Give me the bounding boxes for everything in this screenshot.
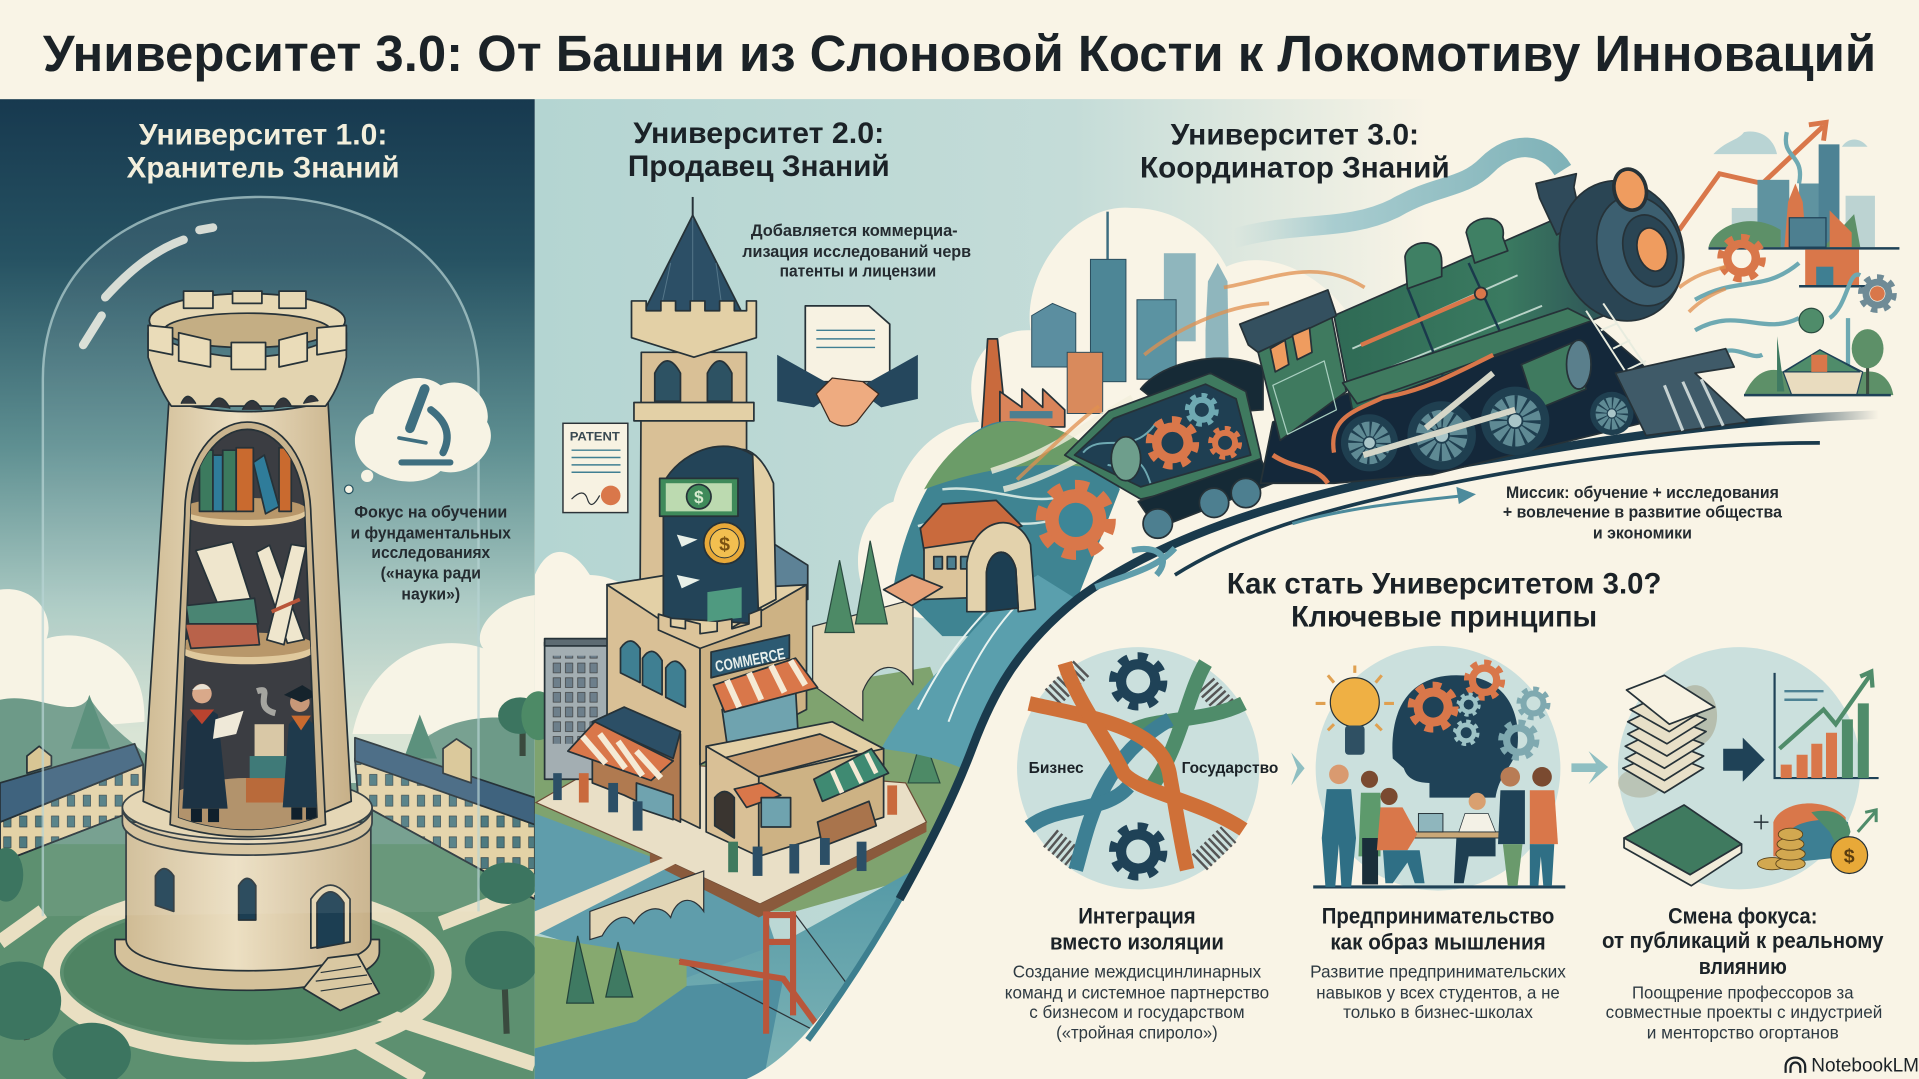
cowcatcher — [1615, 349, 1748, 436]
title: Университет 3.0: От Башни из Слоновой Кости к Локомотиву Инноваций — [43, 24, 1876, 82]
lawn — [0, 844, 535, 1079]
heading: university 1.0: Университет 1.0: — [139, 118, 387, 151]
bar chart — [1775, 672, 1879, 778]
smokestack — [1536, 174, 1581, 235]
awning: green — [814, 749, 889, 801]
gears in head — [1411, 685, 1455, 729]
student figure — [283, 685, 321, 820]
heading: university 3.0 — [1140, 118, 1450, 184]
clouds — [1713, 131, 1868, 154]
trees — [825, 541, 887, 632]
heading: university 1.0: Хранитель Знаний — [127, 151, 400, 184]
lower bridges — [535, 856, 857, 1046]
spire — [644, 197, 742, 312]
green book — [1624, 805, 1742, 886]
direction arrow — [1292, 487, 1476, 524]
campus paths — [0, 887, 535, 1079]
caption: university 1.0: Фокус на обучении — [354, 503, 507, 521]
tower battlements — [148, 291, 346, 410]
professor figure — [182, 684, 244, 822]
money arch — [660, 446, 776, 624]
labels: Бизнес — [1029, 760, 1084, 777]
person 2 — [1358, 771, 1381, 884]
navy arrow — [1723, 738, 1765, 782]
NotebookLM badge: NotebookLM — [1811, 1055, 1919, 1077]
node — [1799, 308, 1824, 333]
tower shaft — [143, 401, 351, 826]
chevron — [1291, 752, 1305, 785]
person 1 — [1322, 765, 1356, 887]
stone viaduct — [813, 599, 913, 721]
caption: university 1.0: исследованиях — [371, 544, 491, 562]
left tree — [521, 691, 556, 740]
plaza — [536, 758, 926, 904]
principle 2 text: Развитие предпринимательских — [1310, 961, 1566, 981]
shelf: middle — [181, 632, 313, 664]
caption: university 1.0: науки») — [401, 585, 460, 603]
person 5 — [1498, 767, 1525, 886]
caption: mission: Миссик: обучение + исследования — [1506, 484, 1779, 502]
right side: city and growth — [1679, 122, 1899, 395]
orange pipes — [1333, 355, 1493, 453]
growth arrow — [1679, 122, 1826, 230]
principle 3 text: и менторство огортанов — [1647, 1023, 1839, 1043]
handshake with contract — [777, 306, 918, 426]
trees — [567, 936, 633, 1003]
big orange gear with teal ornaments — [1041, 486, 1175, 587]
principle 3: focus shift circle — [1618, 647, 1879, 889]
locomotive — [1065, 164, 1748, 538]
tower interior — [169, 421, 326, 838]
sleeves and hands — [777, 355, 838, 407]
impact blob and coins: $ — [1844, 845, 1855, 867]
panel: university 2.0 and 3.0 background — [535, 99, 1919, 1079]
microscope icon — [399, 389, 450, 462]
patent document — [563, 423, 628, 513]
belfry — [632, 301, 756, 599]
principle 2 text — [1310, 904, 1566, 1022]
awning: right — [714, 658, 818, 712]
gear: orange — [1721, 237, 1762, 279]
caption: university 2.0: лизация исследований черв — [742, 243, 971, 261]
lightbulb — [1316, 666, 1394, 755]
gears — [1113, 656, 1163, 706]
clouds — [0, 589, 538, 734]
principle 2 text: только в бизнес-школах — [1343, 1002, 1533, 1022]
stacked books and steam — [246, 690, 286, 803]
principle 1 text: Интеграция — [1078, 904, 1196, 929]
impact blob and coins — [1754, 803, 1876, 873]
gear: grey — [1861, 277, 1894, 310]
tree — [908, 734, 940, 783]
factory block — [1799, 250, 1866, 286]
back wing roof — [765, 538, 808, 599]
heading: university 1.0 — [127, 118, 400, 184]
arrow between principles — [1571, 751, 1608, 784]
strands — [1029, 663, 1243, 870]
principle 3 text: влиянию — [1699, 954, 1787, 979]
principle 2: entrepreneurship circle — [1313, 646, 1565, 891]
boiler — [1334, 206, 1646, 410]
arrows — [677, 535, 700, 588]
left factory — [982, 339, 1065, 434]
smokebox — [1541, 164, 1702, 337]
principle 3 text: от публикаций к реальному — [1602, 928, 1884, 953]
books on shelf — [199, 448, 291, 514]
caption: mission — [1503, 484, 1783, 542]
principle 3 text: Поощрение профессоров за — [1632, 982, 1854, 1002]
banknote: $ — [694, 487, 704, 507]
caption: university 2.0 — [742, 222, 971, 280]
shelf: top — [184, 498, 306, 526]
lower market block — [706, 722, 889, 856]
lower right cream area — [747, 415, 1919, 1079]
caption: university 2.0: Добавляется коммерциа- — [751, 222, 958, 240]
scrolls and books — [185, 542, 306, 648]
thought cloud with microscope — [345, 378, 491, 494]
head silhouette — [1392, 675, 1518, 798]
patent document: PATENT — [570, 430, 620, 443]
waterfall — [881, 575, 1077, 771]
principle 1 text: Создание междисцинлинарных — [1013, 961, 1261, 981]
grey side building — [545, 639, 608, 779]
ladder — [1586, 303, 1664, 404]
railway track — [808, 415, 1879, 1040]
person 3 — [1377, 788, 1425, 883]
house — [1744, 329, 1893, 395]
building: right campus wing — [355, 738, 535, 899]
panel: commerce tower — [535, 197, 926, 1046]
caption: university 1.0: («наука ради — [381, 565, 481, 583]
caption: mission: и экономики — [1593, 524, 1692, 542]
principle 1 text: вместо изоляции — [1050, 929, 1224, 954]
heading: university 2.0: Продавец Знаний — [628, 150, 890, 183]
trees — [0, 697, 542, 1079]
dust — [1673, 685, 1717, 746]
caption: university 1.0: и фундаментальных — [351, 524, 512, 542]
principle 1: integration circle: Государство — [1182, 760, 1279, 777]
skyline — [1708, 144, 1875, 247]
cylinder — [1521, 343, 1586, 410]
connecting rods — [1363, 373, 1515, 455]
main building block — [607, 575, 807, 828]
tender — [1065, 358, 1273, 538]
heading: university 2.0: Университет 2.0: — [633, 117, 884, 150]
principle 1: integration circle — [1017, 647, 1279, 889]
caption: university 2.0: патенты и лицензии — [780, 262, 936, 280]
principle 2 text: навыков у всех студентов, а не — [1316, 982, 1560, 1002]
contract — [805, 306, 890, 382]
principle 1 text: с бизнесом и государством — [1029, 1002, 1245, 1022]
paper stack — [1623, 675, 1715, 793]
connector lines — [1695, 132, 1860, 367]
heading: university 3.0: Университет 3.0: — [1171, 118, 1419, 151]
running board — [1343, 308, 1592, 404]
principle 2 text: как образ мышления — [1330, 929, 1546, 954]
tower base — [115, 776, 379, 1010]
principle 1 text: («тройная спироло») — [1056, 1023, 1218, 1043]
left shop — [592, 707, 680, 822]
heading: key principles: Ключевые принципы — [1291, 600, 1597, 633]
caption: university 1.0 — [351, 503, 512, 603]
clouds behind middle and right scenes — [535, 208, 1469, 734]
driving wheels — [1341, 387, 1634, 471]
principle 2 text: Предпринимательство — [1322, 904, 1554, 929]
tunnel — [884, 500, 1035, 612]
building: left campus wing — [0, 744, 143, 862]
principle 1 text — [1005, 904, 1269, 1043]
person 6 — [1530, 767, 1558, 886]
heading: university 2.0 — [628, 117, 890, 183]
principle 3 text: совместные проекты с индустрией — [1606, 1002, 1882, 1022]
steam smoke — [1234, 147, 1563, 239]
coin — [704, 522, 745, 564]
glass dome — [43, 197, 479, 916]
commerce sign — [711, 635, 789, 678]
suspension bridge — [679, 911, 857, 1046]
panel: university 1.0 — [0, 99, 542, 1079]
person 4 — [1454, 793, 1496, 883]
dna rungs — [1050, 667, 1230, 862]
cab — [1240, 290, 1346, 440]
heading: key principles: Как стать Университетом 3.0? — [1227, 567, 1661, 600]
battlements in front of arch — [658, 609, 761, 648]
coin: $ — [719, 534, 730, 556]
shop window — [722, 688, 798, 752]
principle 3 text: Смена фокуса: — [1668, 904, 1817, 929]
frame and chassis — [1261, 321, 1652, 483]
hills — [0, 697, 535, 1079]
shop front — [568, 635, 818, 822]
scene: river and land — [521, 599, 973, 1079]
team — [1313, 765, 1565, 887]
speed streaks — [1017, 267, 1726, 480]
scene: hill with city — [893, 212, 1229, 636]
principle 3 text — [1602, 904, 1884, 1043]
heading: university 3.0: Координатор Знаний — [1140, 151, 1450, 184]
banknote — [660, 478, 738, 516]
caption: mission: + вовлечение в развитие общества — [1503, 503, 1783, 521]
principle 1 text: команд и системное партнерство — [1005, 982, 1269, 1002]
commerce sign: COMMERCE — [714, 646, 787, 676]
awning: left — [568, 722, 673, 781]
people on plaza — [553, 773, 897, 876]
left skyline — [1032, 212, 1229, 413]
tunnel and waterfall — [825, 500, 1077, 771]
hillside — [893, 421, 1120, 636]
heading: key principles — [1227, 567, 1661, 633]
green banknote outline — [707, 587, 742, 621]
